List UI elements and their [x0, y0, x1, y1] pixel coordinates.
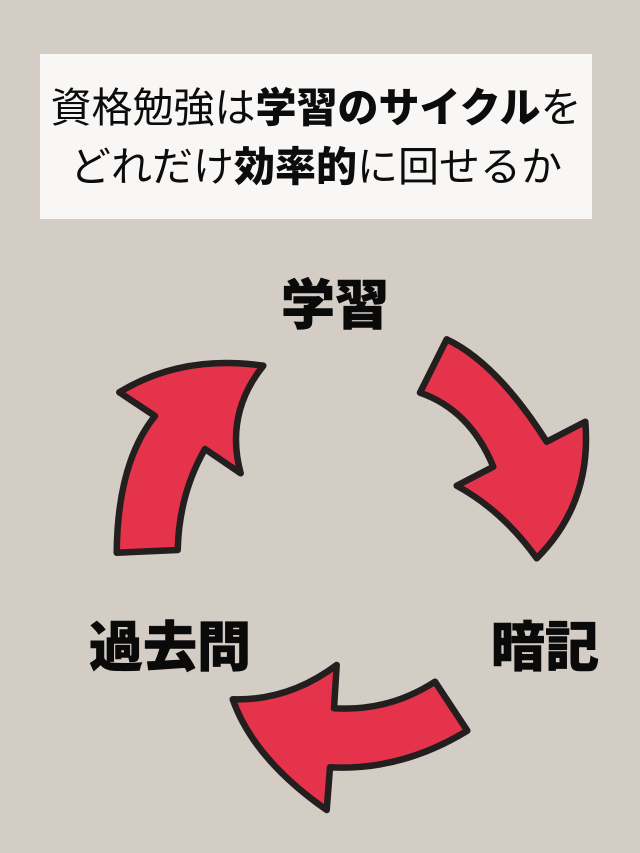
label: memorization: 暗記: [491, 618, 599, 678]
label: study: 学習: [281, 276, 389, 336]
arrow: past exams to study: [117, 363, 263, 553]
arrow: study to memorization: [420, 339, 586, 558]
title panel: [40, 54, 592, 219]
arrow: memorization to past exams: [233, 665, 467, 810]
title line 1: 資格勉強は学習のサイクルを: [51, 85, 581, 131]
title line 2: どれだけ効率的に回せるか: [70, 144, 562, 190]
label: past exams: 過去問: [89, 618, 251, 678]
